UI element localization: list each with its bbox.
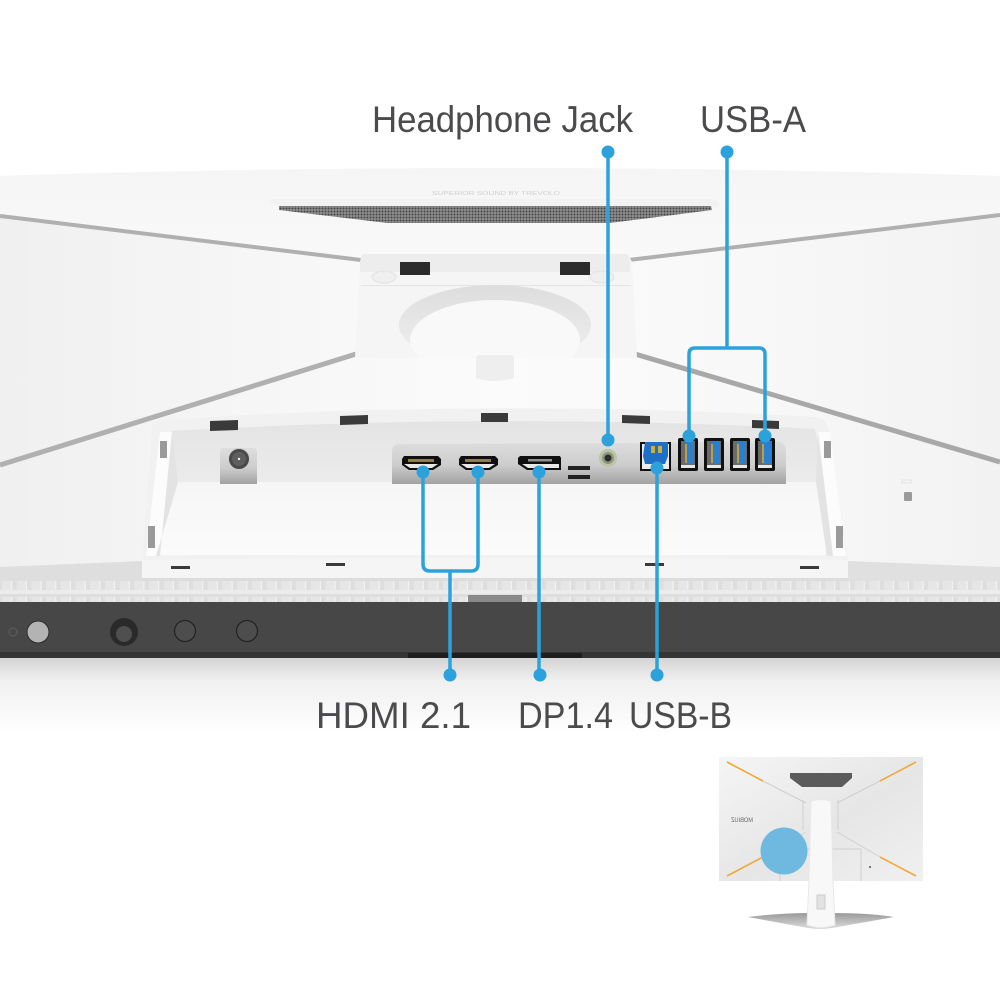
ports panel: [392, 438, 786, 484]
label: HDMI 2.1: HDMI 2.1: [316, 695, 471, 736]
port: USB-B: [640, 442, 671, 471]
port bay: [142, 408, 848, 578]
thumbnail: brand text: MOBIUZ: [731, 818, 753, 824]
port: USB-A 2: [704, 438, 724, 471]
shell seam lines: [0, 215, 1000, 465]
line: HDMI bracket: [423, 472, 478, 675]
lower shelf left and right: [0, 561, 1000, 584]
lock slot: [902, 480, 912, 501]
callout lines: [423, 152, 765, 675]
button 2: [236, 620, 258, 642]
label: Headphone Jack: Headphone Jack: [372, 99, 633, 140]
speaker grille: [270, 191, 719, 223]
port: HDMI 2: [459, 456, 498, 470]
callout dots: [416, 146, 772, 682]
port: headphone jack socket: [599, 449, 617, 467]
label: USB-A: USB-A: [700, 99, 806, 140]
power button: [27, 621, 49, 643]
label: DP1.4: DP1.4: [518, 695, 613, 736]
port: HDMI 1: [402, 456, 441, 470]
monitor back shell: [0, 168, 1000, 605]
thumbnail: speaker: [790, 773, 852, 787]
thumbnail: cable slot: [817, 895, 825, 909]
power socket: [220, 448, 257, 484]
thumbnail: stand neck: [807, 800, 835, 928]
port: USB-A 4: [755, 438, 775, 471]
port: USB-A 3: [730, 438, 750, 471]
line: USB-B: [655, 468, 659, 675]
line: DisplayPort: [537, 472, 541, 675]
thumbnail: seam lines: [763, 781, 880, 881]
thumbnail: lock dot: [869, 866, 871, 868]
label: USB-B: USB-B: [629, 695, 732, 736]
stand mount recess: [355, 254, 637, 381]
power LED: [9, 628, 17, 636]
control strip: [0, 595, 1000, 659]
thumbnail: highlight circle: [760, 828, 808, 874]
line: USB-A bracket: [689, 152, 765, 436]
port: USB-A 1: [678, 438, 698, 471]
port: DisplayPort: [518, 456, 561, 470]
thumbnail: stand base: [748, 913, 894, 929]
line: headphone jack: [606, 152, 610, 440]
thumbnail: monitor back: [719, 757, 923, 881]
joystick: [110, 618, 138, 646]
ribbed vent band: [0, 581, 1000, 603]
locator thumbnail: [719, 757, 923, 929]
button 1: [174, 620, 196, 642]
speaker grille: SUPERIOR SOUND BY TREVOLO: [432, 191, 560, 197]
thumbnail: orange light bars: [727, 762, 916, 876]
vent slots: [568, 466, 590, 479]
floor shadow: [0, 658, 1000, 734]
